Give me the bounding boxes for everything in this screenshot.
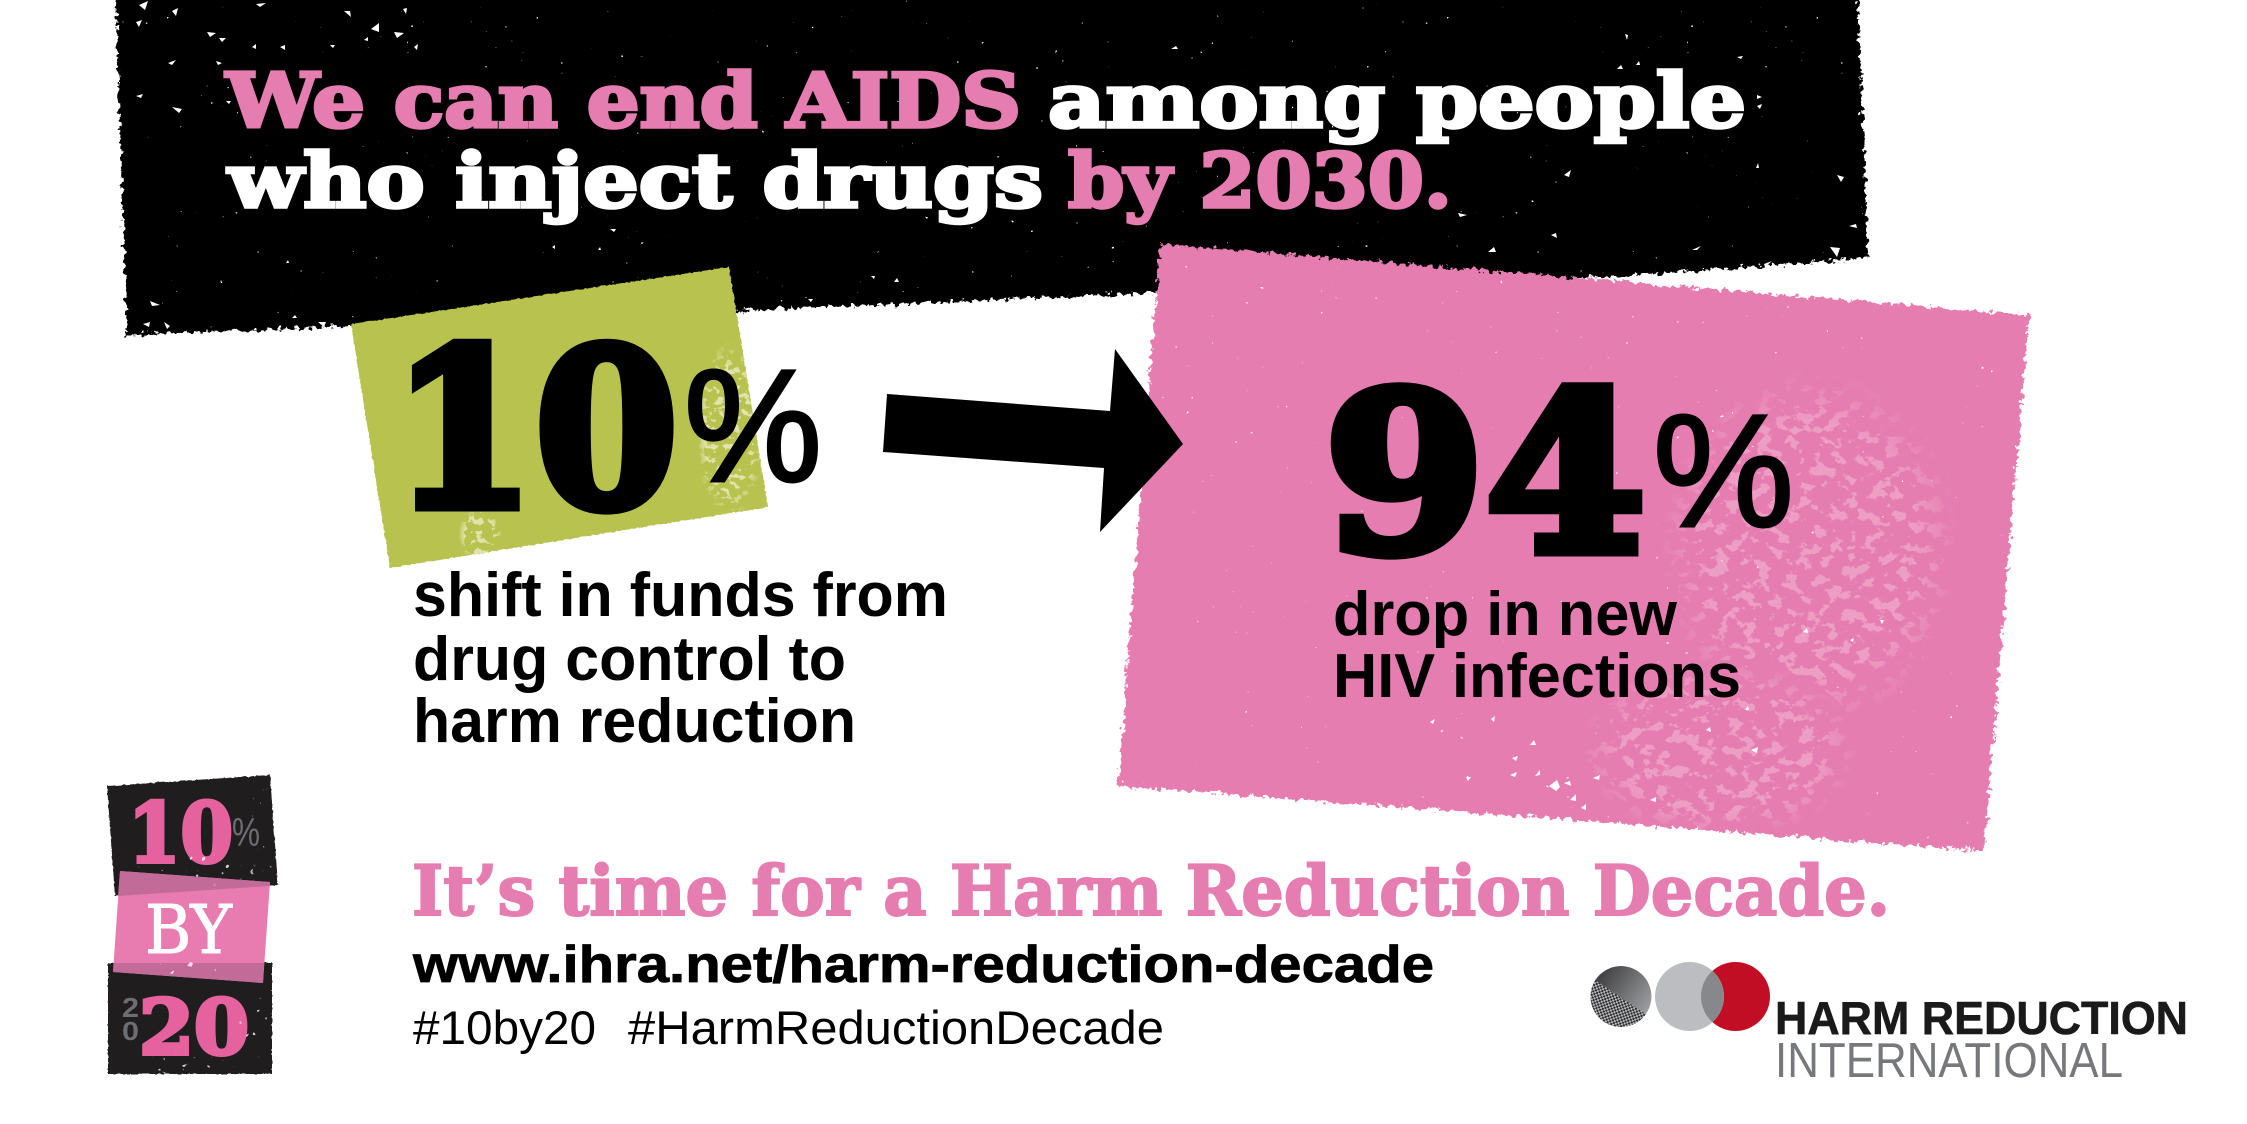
text block: drop in new HIV infections: HIV infections [1333, 642, 1741, 711]
heading: We can end AIDS among people who inject drugs by 2030: among people [1048, 57, 1746, 145]
text: website address: www.ihra.net/harm-reduction-decade [412, 936, 1434, 994]
text: INTERNATIONAL: INTERNATIONAL [1775, 1034, 2123, 1088]
text block: shift in funds from drug control to harm reduction: shift in funds from [413, 561, 948, 630]
logo block: BY [113, 871, 270, 983]
text: HARM REDUCTION: HARM REDUCTION [1775, 992, 2188, 1044]
panel: black headline banner [100, 0, 1880, 340]
heading: It's time for a Harm Reduction Decade: It’s time for a Harm Reduction Decade. [412, 851, 1890, 932]
logo block: 10 percent [107, 775, 278, 896]
text block: drop in new HIV infections: drop in new [1333, 580, 1678, 649]
logo block: 20 [108, 963, 272, 1074]
logo block: 20: 20 [139, 983, 249, 1072]
statistic: 94 percent: % [1653, 381, 1794, 560]
heading: We can end AIDS among people who inject drugs by 2030: who inject drugs [227, 137, 1043, 225]
heading: We can end AIDS among people who inject drugs by 2030 [225, 57, 1746, 225]
text: hashtags: #10by20 [413, 1001, 596, 1054]
logo block: 10 percent: 10 [128, 786, 233, 882]
statistic: 94 percent [1324, 344, 1794, 603]
heading: We can end AIDS among people who inject drugs by 2030: by 2030. [1068, 137, 1452, 225]
arrow: from funding shift to infection drop [883, 349, 1183, 532]
logo block: 10 percent: % [232, 811, 260, 855]
logo: Harm Reduction International [1585, 962, 2188, 1088]
text: hashtags: #HarmReductionDecade [628, 1001, 1164, 1054]
statistic: 10 percent: % [684, 336, 822, 515]
text block: shift in funds from drug control to harm reduction [413, 561, 948, 756]
logo: 10 by 20 [106, 774, 278, 1074]
statistic: 10 percent: 10 [392, 302, 678, 558]
statistic: 94 percent: 94 [1324, 344, 1646, 603]
icon: grey and red overlapping circles [1655, 962, 1770, 1031]
icon: halftone circle [1590, 966, 1652, 1027]
logo block: 20: 2 [122, 992, 139, 1023]
panel: green 10 percent block [350, 266, 768, 568]
text block: drop in new HIV infections [1333, 580, 1741, 711]
heading: We can end AIDS among people who inject drugs by 2030: We can end AIDS [225, 57, 1021, 145]
logo block: BY: BY [145, 891, 233, 969]
logo block: 20: 0 [122, 1016, 139, 1046]
panel: pink 94 percent block [1100, 230, 2050, 870]
text: hashtags [413, 1001, 1164, 1054]
text block: shift in funds from drug control to harm reduction: harm reduction [413, 687, 856, 756]
text block: shift in funds from drug control to harm reduction: drug control to [413, 625, 846, 694]
